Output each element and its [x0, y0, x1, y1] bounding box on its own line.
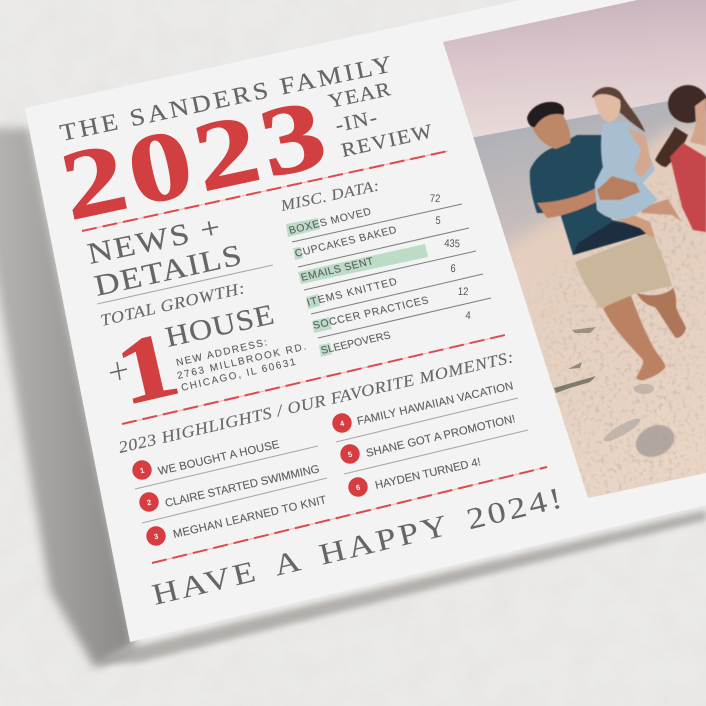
red twisted divider 3	[152, 467, 547, 563]
photo sand	[500, 120, 706, 520]
values: 435	[444, 238, 460, 251]
item 3: 3	[153, 532, 159, 541]
card shadow	[0, 128, 706, 668]
row: soccer practices: SOCCER PRACTICES	[312, 294, 430, 332]
big red year 2023: 2023	[52, 78, 340, 241]
values	[430, 193, 471, 322]
row: emails sent: EMAILS SENT	[299, 255, 375, 284]
child dress	[595, 122, 658, 219]
row: items knitted: ITEMS KNITTED	[305, 276, 399, 309]
highlights heading: 2023 HIGHLIGHTS / OUR FAVORITE MOMENTS:	[117, 348, 515, 457]
plus icon	[110, 362, 127, 380]
woman ponytail	[655, 127, 688, 167]
values: 4	[465, 310, 471, 322]
year-in-review stack	[326, 77, 434, 162]
item 6: HAYDEN TURNED 4!	[374, 456, 482, 492]
bar chart: misc data	[286, 193, 491, 357]
bars	[286, 218, 428, 357]
review: REVIEW	[339, 119, 434, 162]
values: 6	[450, 263, 456, 275]
in: -IN-	[333, 106, 379, 137]
title: the Sanders family: THE SANDERS FAMILY	[58, 50, 394, 147]
item 4: 4	[339, 418, 346, 428]
details: DETAILS	[91, 238, 244, 302]
red twisted divider 2	[122, 335, 505, 424]
photo sky	[430, 0, 706, 140]
item 6: 6	[355, 483, 361, 492]
values: 12	[458, 286, 469, 298]
item 3: MEGHAN LEARNED TO KNIT	[172, 494, 328, 541]
highlights list	[132, 380, 528, 546]
item 5: 5	[347, 450, 353, 459]
item 5: SHANE GOT A PROMOTION!	[365, 413, 517, 460]
photo people	[527, 85, 706, 380]
red twisted divider 1	[82, 151, 448, 231]
new address block	[175, 337, 307, 394]
panel: family beach photo	[430, 0, 706, 520]
item 2: 2	[146, 498, 152, 507]
item 1: 1	[139, 466, 145, 475]
street: 2763 MILLBROOK RD.	[176, 342, 307, 382]
man head	[527, 102, 570, 149]
woman hair and face	[668, 85, 706, 146]
address heading: NEW ADDRESS:	[175, 337, 268, 369]
closing message: HAVE A HAPPY 2024!	[149, 481, 565, 612]
photo sea	[470, 94, 706, 270]
child arm	[627, 128, 652, 178]
row: sleepovers: SLEEPOVERS	[320, 329, 392, 357]
values: 72	[430, 193, 441, 205]
total growth label: TOTAL GROWTH:	[99, 279, 246, 330]
child head	[592, 87, 645, 132]
man hand on child	[597, 176, 640, 200]
man back leg	[637, 288, 686, 338]
heading: news and details	[84, 210, 244, 302]
child legs	[614, 198, 681, 238]
woman red shirt	[670, 143, 706, 232]
row: boxes moved: BOXES MOVED	[287, 206, 373, 237]
house label: HOUSE	[162, 298, 277, 353]
man front leg	[603, 293, 665, 380]
item 2: CLAIRE STARTED SWIMMING	[164, 463, 321, 510]
values: 5	[435, 215, 441, 227]
man shirt hem shadow	[573, 222, 652, 255]
man shirt	[530, 135, 652, 255]
big red numeral 1: 1	[107, 313, 188, 425]
item 1: WE BOUGHT A HOUSE	[157, 439, 281, 478]
item 4: FAMILY HAWAIIAN VACATION	[356, 380, 515, 428]
misc data heading: MISC. DATA:	[278, 176, 381, 215]
man shorts	[575, 232, 672, 308]
row: cupcakes baked: CUPCAKES BAKED	[293, 224, 398, 260]
city: CHICAGO, IL 60631	[180, 357, 297, 394]
year: YEAR	[326, 77, 392, 113]
man arm	[536, 188, 597, 218]
news: NEWS +	[84, 210, 223, 270]
